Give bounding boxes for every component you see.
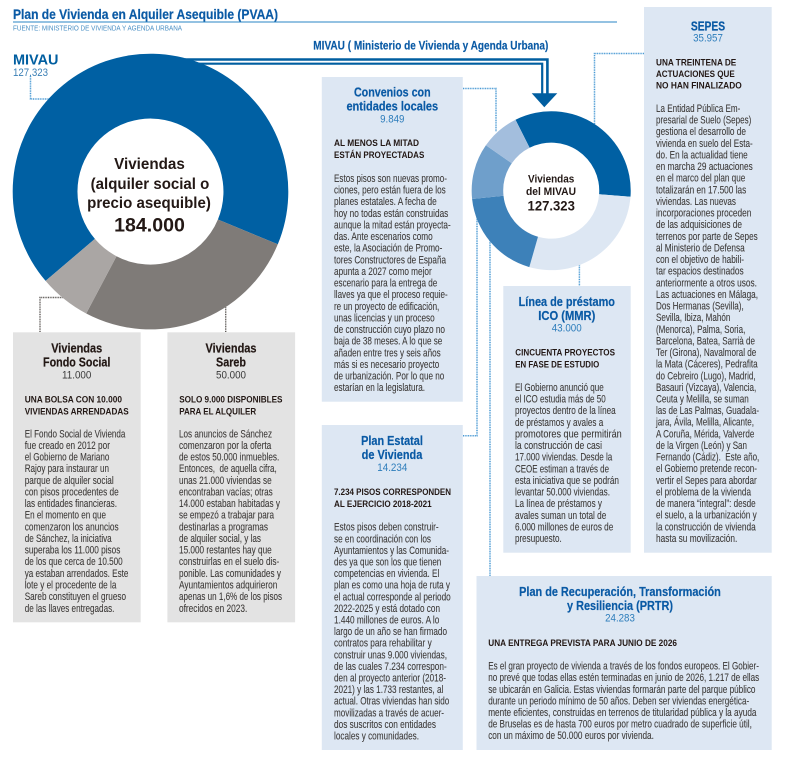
donut centre label: total: Viviendas <box>114 156 185 173</box>
connector: MIVAU label <box>30 76 50 99</box>
panel heading: PRTR <box>519 584 721 613</box>
body text: SEPES: A Coruña, Mérida, Valverde <box>656 428 754 440</box>
body text: SEPES: el Gobierno pretende recon- <box>656 463 757 475</box>
panel heading: Plan Estatal: de Vivienda <box>362 447 423 462</box>
number: 9.849: 9.849 <box>380 113 404 125</box>
body text: Plan Estatal: contratos para rehabilitar y <box>334 638 432 650</box>
body text: Fondo Social: de los que cerca de 10.500 <box>25 556 123 568</box>
body text: SEPES: vivienda en suelo del Esta- <box>656 138 753 150</box>
donut chart: total housing <box>13 54 288 329</box>
panel heading: Sareb: Sareb <box>216 354 246 369</box>
subheading: Convenios: AL MENOS LA MITAD <box>334 138 419 148</box>
donut centre label: MIVAU <box>526 174 576 214</box>
subheading: Sareb <box>179 394 282 416</box>
body text: Plan Estatal: se en coordinación con los <box>334 533 431 545</box>
panel heading: SEPES: SEPES <box>691 18 726 33</box>
body text: SEPES: Dos Hermanas (Sevilla), <box>656 300 744 312</box>
body text: Convenios: escenario para la entrega de <box>334 278 437 290</box>
body text: ICO: 6.000 millones de euros de <box>515 521 613 533</box>
body text: SEPES: (Menorca), Palma, Soria, <box>656 324 745 336</box>
body text: Sareb: destinarlas a programas <box>179 521 268 533</box>
body text: Fondo Social: En el momento en que <box>25 510 106 522</box>
donut centre label: total: precio asequible) <box>87 195 211 212</box>
donut chart: MIVAU breakdown <box>472 111 631 270</box>
body text: SEPES: anteriormente a otros usos. <box>656 277 757 289</box>
body text: Fondo Social: lote y el procedente de la <box>25 580 116 592</box>
body text: SEPES: do Cebreiro (Lugo), Madrid, <box>656 370 756 382</box>
body text: Sareb: de estos 50.000 inmuebles. <box>179 452 279 464</box>
source note: FUENTE: MINISTERIO DE VIVIENDA Y AGENDA URBANA <box>13 25 182 32</box>
body text: Fondo Social: de las llaves entregadas. <box>25 603 114 615</box>
donut centre label: total <box>87 156 211 237</box>
number: 24.283: 24.283 <box>605 613 635 625</box>
subheading: SEPES: ACTUACIONES QUE <box>656 69 735 79</box>
panel heading: Fondo Social: Viviendas <box>51 340 102 355</box>
body text: Fondo Social: con pisos procedentes de <box>25 486 119 498</box>
body text: ICO: levantar 50.000 viviendas. <box>515 487 610 499</box>
panel heading: Sareb: Viviendas <box>206 340 256 355</box>
body text: SEPES: Ceuta y Melilla, se suman <box>656 394 749 406</box>
body text: ICO: la construcción de casi <box>515 440 602 452</box>
body text: SEPES: al Ministerio de Defensa <box>656 242 745 254</box>
panel heading: ICO <box>519 294 615 323</box>
body text: SEPES: presarial de Suelo (Sepes) <box>656 115 751 127</box>
body text: ICO: La línea de préstamos y <box>515 498 603 510</box>
subheading: Fondo Social <box>25 394 129 416</box>
panel: Plan Estatal de Vivienda <box>322 425 463 750</box>
body text: SEPES: Sevilla, Ibiza, Mahón <box>656 312 730 324</box>
panel heading: Convenios: entidades locales <box>346 99 438 114</box>
body text: Convenios: apunta a 2027 como mejor <box>334 266 432 278</box>
connector: Sareb <box>225 305 227 332</box>
body text: ICO: 17.000 viviendas. Desde la <box>515 452 612 464</box>
panel heading: Fondo Social <box>43 340 110 369</box>
body text: Plan Estatal: 2021) y las 1.733 restantes, al <box>334 684 443 696</box>
number: 50.000: 50.000 <box>216 369 246 381</box>
body text: Convenios <box>334 173 451 394</box>
panel: Plan de Recuperación, Transformación y Resiliencia <box>476 576 772 750</box>
body text: Sareb <box>179 428 282 615</box>
panel: Línea de préstamo ICO (MMR) <box>503 286 631 553</box>
body text: ICO: El Gobierno anunció que <box>515 382 604 394</box>
panel heading: Convenios <box>346 85 438 114</box>
body text: Plan Estatal: largo de un año se han firmado <box>334 626 447 638</box>
body text: Sareb: Ayuntamientos adquirieron <box>179 580 277 592</box>
body text: Plan Estatal: Estos pisos deben construir- <box>334 522 439 534</box>
subheading: Fondo Social: VIVIENDAS ARRENDADAS <box>25 406 129 416</box>
body text: Fondo Social: las entidades financieras. <box>25 498 117 510</box>
body text: SEPES: de la Virgen (León) y San <box>656 440 747 452</box>
subheading: SEPES: NO HAN FINALIZADO <box>656 80 742 90</box>
body text: Fondo Social: superaba los 11.000 pisos <box>25 545 120 557</box>
body text: Convenios: Estos pisos son nuevas promo- <box>334 173 447 185</box>
body text: Sareb: 14.000 estaban habitadas y <box>179 498 281 510</box>
body text: SEPES: totalizarán en 17.500 las <box>656 184 746 196</box>
body text: Convenios: más si es necesario proyecto <box>334 359 439 371</box>
body text: SEPES: tar espacios destinados <box>656 266 744 278</box>
body text: Convenios: de urbanización. Por lo que no <box>334 370 444 382</box>
body text: Sareb: ofrecidos en 2023. <box>179 603 247 615</box>
label: MIVAU total: 127.323 <box>13 67 48 79</box>
body text: ICO: promotores que permitirán <box>515 428 622 440</box>
heading: MIVAU ministry: MIVAU ( Ministerio de Vivienda y Agenda Urbana) <box>313 38 548 52</box>
body text: Plan Estatal: competencias en vivienda. El <box>334 568 439 580</box>
body text: Sareb: Entonces, de aquella cifra, <box>179 463 277 475</box>
body text: Sareb: Los anuncios de Sánchez <box>179 428 272 440</box>
body text: ICO: presupuesto. <box>515 533 562 545</box>
body text: Convenios: ciones, pero están fuera de los <box>334 185 446 197</box>
body text: Convenios: aunque la mitad están proyecta- <box>334 220 451 232</box>
body text: SEPES: de las adquisiciones de <box>656 219 742 231</box>
body text: Fondo Social: parque de alquiler social <box>25 475 114 487</box>
subheading: Convenios <box>334 138 424 160</box>
body text: Fondo Social <box>25 428 128 615</box>
body text: Fondo Social: ya estaban arrendados. Este <box>25 568 128 580</box>
connector: Plan Estatal <box>463 215 477 436</box>
number: 11.000: 11.000 <box>62 369 91 381</box>
body text: ICO: esta iniciativa que se podrán <box>515 475 619 487</box>
body text: Sareb: se empezó a trabajar para <box>179 510 274 522</box>
panel heading: Fondo Social: Fondo Social <box>43 354 110 369</box>
body text: SEPES: viviendas. Las nuevas <box>656 196 736 208</box>
donut centre label: total: 184.000 <box>114 215 185 237</box>
body text: SEPES: con el objetivo de habili- <box>656 254 744 266</box>
title: Plan de Vivienda en Alquiler Asequible (PVAA) <box>13 6 278 22</box>
body text: SEPES: en el marco del plan que <box>656 173 745 185</box>
subheading: Plan Estatal <box>334 487 451 509</box>
body text: Convenios: baja de 38 meses. A lo que se <box>334 336 442 348</box>
body text: SEPES: do. En la actualidad tiene <box>656 150 748 162</box>
body text: Convenios: planes estatales. A fecha de <box>334 196 437 208</box>
panel: SEPES <box>644 7 772 553</box>
body text: Convenios: estarían en la legislatura. <box>334 382 425 394</box>
panel heading: PRTR: Plan de Recuperación, Transformación <box>519 584 721 599</box>
body text: ICO <box>515 382 622 545</box>
body text: Fondo Social: comenzaron los anuncios <box>25 521 119 533</box>
connector: SEPES <box>594 54 644 125</box>
panel: Convenios con entidades locales <box>322 77 463 402</box>
subheading: Fondo Social: UNA BOLSA CON 10.000 <box>25 394 122 404</box>
body text: Plan Estatal: den al proyecto anterior (2018- <box>334 672 446 684</box>
connector: ICO <box>578 262 580 286</box>
body text: SEPES: en marcha 29 actuaciones <box>656 161 753 173</box>
body text: SEPES: incorporaciones proceden <box>656 208 751 220</box>
subheading: ICO: EN FASE DE ESTUDIO <box>515 359 599 369</box>
body text: Fondo Social: de Sánchez, la iniciativa <box>25 533 112 545</box>
body text: Plan Estatal: plan es como una hoja de ruta y <box>334 580 451 592</box>
body text: Plan Estatal: locales y comunidades. <box>334 730 419 742</box>
subheading: Sareb: SOLO 9.000 DISPONIBLES <box>179 394 282 404</box>
body text: SEPES: Ter (Girona), Navalmoral de <box>656 347 756 359</box>
body text: Sareb: encontraban vacías; otras <box>179 486 273 498</box>
body text: Plan Estatal: dos suscritos con entidades <box>334 719 436 731</box>
body text: Plan Estatal: el actual corresponde al periodo <box>334 591 451 603</box>
subheading: ICO <box>515 348 615 369</box>
subheading: Plan Estatal: AL EJERCICIO 2018-2021 <box>334 499 432 509</box>
body text: ICO: el ICO estudia más de 50 <box>515 394 606 406</box>
body text: Plan Estatal: de las cuales 7.234 correspon- <box>334 661 447 673</box>
body text: Plan Estatal: 2022-2025 y está dotado con <box>334 603 440 615</box>
body text: Convenios: unas licencias y un proceso <box>334 312 435 324</box>
body text: SEPES: el suelo, a la urbanización y <box>656 510 757 522</box>
body text: Plan Estatal: actual. Otras viviendas han sido <box>334 696 449 708</box>
panel heading: PRTR: y Resiliencia (PRTR) <box>567 598 673 613</box>
body text: Fondo Social: el Gobierno de Mariano <box>25 452 109 464</box>
subheading: SEPES: UNA TREINTENA DE <box>656 57 736 67</box>
body text: Fondo Social: El Fondo Social de Vivienda <box>25 428 125 440</box>
body text: Sareb: de alquiler social, y las <box>179 533 261 545</box>
body text: Plan Estatal: Ayuntamientos y las Comunida- <box>334 545 449 557</box>
panel heading: Plan Estatal <box>361 433 423 462</box>
body text: SEPES: vertir el Sepes para abordar <box>656 475 757 487</box>
body text: Sareb: ponible. Las comunidades y <box>179 568 282 580</box>
body text: Convenios: re un proyecto de edificación, <box>334 301 439 313</box>
body text: SEPES: La Entidad Pública Em- <box>656 103 741 115</box>
donut centre label: total: (alquiler social o <box>91 176 210 193</box>
body text: Sareb: comenzaron por la oferta <box>179 440 271 452</box>
body text: Convenios: este, la Asociación de Promo- <box>334 243 443 255</box>
panel heading: Sareb <box>206 340 256 369</box>
body text: SEPES: jara, Ávila, Melilla, Alicante, <box>655 416 754 429</box>
body text: Plan Estatal: movilizadas a través de acuer- <box>334 707 444 719</box>
panel: Viviendas Sareb <box>167 332 295 622</box>
donut centre label: MIVAU: del MIVAU <box>526 186 576 198</box>
panel: Viviendas Fondo Social <box>13 332 141 622</box>
body text: SEPES: terrenos por parte de Sepes <box>656 231 758 243</box>
body text: Plan Estatal <box>334 522 451 742</box>
body text: ICO: proyectos dentro de la línea <box>515 405 616 417</box>
panel heading: Convenios: Convenios con <box>354 85 431 100</box>
body text: Fondo Social: fue creado en 2012 por <box>25 440 110 452</box>
body text: ICO: avales suman un total de <box>515 510 606 522</box>
connector: Fondo Social <box>40 298 64 332</box>
number: 43.000: 43.000 <box>552 323 582 335</box>
number: 14.234: 14.234 <box>377 462 407 474</box>
body text: Sareb: apenas un 1,6% de los pisos <box>179 591 282 603</box>
body text: Fondo Social: Rajoy para instaurar un <box>25 463 109 475</box>
body text: Plan Estatal: des ya que son los que tienen <box>334 556 441 568</box>
body text: SEPES: hasta su movilización. <box>656 533 737 545</box>
body text: ICO: CEOE estiman a través de <box>515 463 609 475</box>
body text: PRTR <box>488 661 759 742</box>
body text: Fondo Social: Sareb constituyen el grueso <box>25 591 126 603</box>
body text: Plan Estatal: construir unas 9.000 viviendas, <box>334 649 447 661</box>
body text: SEPES: Barcelona, Batea, Sarrià de <box>656 335 755 347</box>
body text: SEPES: Basauri (Vizcaya), Valencia, <box>656 382 756 394</box>
body text: ICO: de préstamos y avales a <box>515 417 603 429</box>
body text: Sareb: construirlas en el suelo dis- <box>179 556 280 568</box>
donut centre label: MIVAU: Viviendas <box>528 174 574 186</box>
subheading: PRTR: UNA ENTREGA PREVISTA PARA JUNIO DE 2026 <box>488 638 677 648</box>
label: MIVAU total <box>13 51 58 79</box>
body text: SEPES: de manera “integral”: desde <box>656 498 756 510</box>
subheading: ICO: CINCUENTA PROYECTOS <box>515 348 615 358</box>
body text: SEPES: la construcción de vivienda <box>656 521 756 533</box>
body text: Convenios: hoy no todas están construidas <box>334 208 448 220</box>
subheading: SEPES <box>656 57 742 90</box>
subheading: Plan Estatal: 7.234 PISOS CORRESPONDEN <box>334 487 451 497</box>
label: MIVAU total: MIVAU <box>13 51 58 68</box>
subheading: Convenios: ESTÁN PROYECTADAS <box>334 150 424 160</box>
donut centre label: MIVAU: 127.323 <box>528 199 575 214</box>
body text: Sareb: unas 21.000 viviendas se <box>179 475 272 487</box>
body text: SEPES <box>655 103 759 545</box>
connector: PRTR <box>489 240 491 576</box>
body text: PRTR: con un máximo de 50.000 euros por vivienda. <box>488 730 654 742</box>
body text: SEPES: Las actuaciones en Málaga, <box>656 289 758 301</box>
body text: Convenios: tores Constructores de España <box>334 254 446 266</box>
number: 35.957: 35.957 <box>693 33 723 45</box>
body text: SEPES: el problema de la vivienda <box>656 486 751 498</box>
panel heading: ICO: ICO (MMR) <box>538 308 595 323</box>
body text: SEPES: la Mata (Cáceres), Pedrafita <box>656 359 758 371</box>
body text: Plan Estatal: 1.440 millones de euros. A lo <box>334 614 439 626</box>
body text: Convenios: llaves ya que el proceso requie- <box>334 289 448 301</box>
body text: Convenios: añaden entre tres y seis años <box>334 347 441 359</box>
body text: Convenios: das. Ante escenarios como <box>334 231 433 243</box>
panel heading: ICO: Línea de préstamo <box>519 294 615 309</box>
connector: Convenios <box>463 88 496 132</box>
subheading: Sareb: PARA EL ALQUILER <box>179 406 256 416</box>
panel heading: Plan Estatal: Plan Estatal <box>361 433 423 448</box>
body text: Convenios: de construcción cuyo plazo no <box>334 324 445 336</box>
body text: Sareb: 15.000 restantes hay que <box>179 545 272 557</box>
arrow: MIVAU double line to small donut <box>185 60 557 107</box>
body text: SEPES: gestiona el desarrollo de <box>656 126 746 138</box>
